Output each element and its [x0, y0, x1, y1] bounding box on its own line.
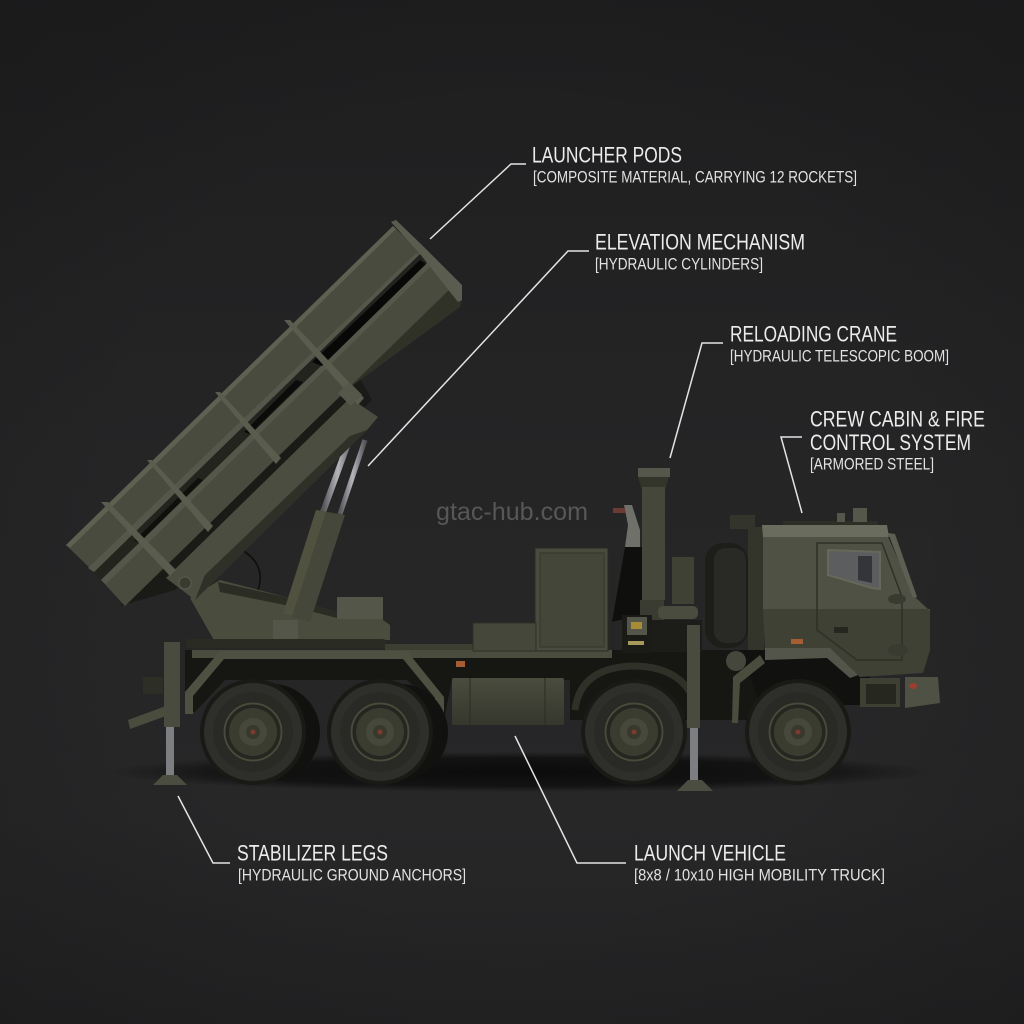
- elevation mechanism: [120, 378, 390, 648]
- rear light box: [143, 677, 163, 694]
- fuel tank: [452, 678, 564, 725]
- arm underside: [195, 430, 367, 600]
- callout: stabilizer legs: STABILIZER LEGS: [237, 840, 388, 866]
- rear bumper: [128, 706, 166, 729]
- black slit: [312, 260, 426, 366]
- bracket: [338, 382, 362, 406]
- wheels: [200, 679, 851, 785]
- red handle: [613, 508, 625, 513]
- strap 2: [215, 392, 281, 464]
- flatbed band: [192, 650, 612, 658]
- machinery block: [652, 620, 702, 652]
- launcher pods: [66, 220, 462, 606]
- callout: launch vehicle: LAUNCH VEHICLE: [634, 840, 786, 866]
- windshield strip: [888, 533, 917, 598]
- pod side shading: [330, 285, 462, 392]
- control panel: [622, 615, 652, 653]
- arch shadow: [740, 650, 880, 705]
- dark underframe: [185, 650, 760, 720]
- callout: elevation mechanism: [368, 230, 805, 466]
- callout: launcher pods: LAUNCHER PODS: [532, 142, 682, 168]
- hinge 1: [888, 594, 906, 604]
- base frame: [190, 580, 390, 642]
- roof dome: [783, 521, 878, 525]
- hydraulic box: [672, 557, 694, 604]
- cylinder: [283, 510, 345, 622]
- red light: [909, 683, 917, 689]
- callout: stabilizer legs: [178, 796, 466, 884]
- step inner: [866, 684, 896, 704]
- marker light: [456, 661, 465, 667]
- pipe coil behind arm: [225, 545, 260, 602]
- lower pod: [101, 262, 452, 606]
- storage box large: [535, 548, 608, 651]
- rear fender: [732, 655, 765, 723]
- cylinder highlight: [283, 510, 326, 616]
- strap 3: [147, 460, 213, 532]
- wheel 2: [327, 679, 433, 785]
- upper pod ridge: [88, 253, 421, 572]
- callout: reloading crane: [HYDRAULIC TELESCOPIC BOOM]: [730, 348, 949, 366]
- callout: launcher pods: [COMPOSITE MATERIAL, CARRYING 12 ROCKETS]: [533, 168, 857, 186]
- strap 1: [284, 320, 364, 405]
- callout: stabilizer legs: [HYDRAULIC GROUND ANCHORS]: [238, 866, 466, 884]
- roof box 1: [853, 508, 867, 522]
- step box: [860, 678, 900, 707]
- deck rail: [385, 644, 473, 650]
- piston rod 2: [340, 440, 365, 514]
- turntable: [186, 639, 386, 648]
- ground shadow: [110, 752, 930, 792]
- upper pod: [66, 226, 421, 572]
- callout: launcher pods: [430, 142, 857, 239]
- rear fender frame: [185, 651, 444, 715]
- window: [828, 550, 880, 589]
- cab lower: [763, 609, 930, 677]
- gap between pods: [93, 254, 428, 582]
- callout: elevation mechanism: ELEVATION MECHANISM: [595, 230, 805, 254]
- strap 4: [101, 502, 176, 576]
- door: [817, 543, 902, 660]
- upper pod top edge: [66, 226, 396, 548]
- hinge 2: [888, 644, 908, 656]
- back wheels behind: [224, 684, 448, 780]
- mudguard front axle: [575, 666, 694, 710]
- spare wheel: [705, 543, 748, 648]
- roof box 2: [837, 513, 845, 522]
- hoses: [612, 547, 642, 622]
- callout: crew cabin and fire control system: CONTROL SYSTEM: [810, 430, 971, 455]
- window pane: [858, 556, 872, 583]
- reloading crane: [612, 468, 702, 653]
- rear column: [748, 527, 764, 650]
- lower fender: [765, 648, 858, 678]
- arm pivot: [179, 577, 191, 589]
- lower pod ridge: [101, 262, 433, 584]
- launcher arm: [166, 398, 378, 600]
- callout: launch vehicle: [515, 736, 885, 884]
- rear leg: [153, 642, 187, 785]
- crew cabin: [726, 508, 940, 723]
- storage box small: [473, 623, 536, 651]
- bumper: [905, 677, 940, 708]
- watermark: gtac-hub.com: [436, 498, 588, 526]
- orange marker: [791, 639, 803, 644]
- wheel 1: [200, 679, 306, 785]
- wheel 3: [581, 679, 687, 785]
- pod to arm shadow: [120, 378, 372, 606]
- callout: reloading crane: [670, 322, 949, 458]
- ball: [726, 651, 746, 671]
- front leg: [677, 625, 713, 791]
- cylinder mount: [273, 620, 298, 641]
- rear vent: [730, 515, 755, 529]
- callout: elevation mechanism: [HYDRAULIC CYLINDERS]: [595, 256, 763, 274]
- base box: [337, 597, 383, 619]
- stabilizer legs: [153, 625, 713, 791]
- base shaded panel: [218, 582, 337, 618]
- pod end face: [391, 220, 462, 302]
- boom base: [640, 600, 664, 630]
- callout: launch vehicle: [8x8 / 10x10 HIGH MOBILITY TRUCK]: [634, 866, 885, 884]
- callout: crew cabin and fire control system: [ARMORED STEEL]: [810, 456, 934, 474]
- piston rod 1: [323, 430, 353, 512]
- lower slit: [134, 478, 203, 542]
- boom: [642, 487, 665, 600]
- cross pipe: [658, 606, 698, 619]
- wheel 4: [745, 679, 851, 785]
- hook: [624, 505, 640, 547]
- boom head: [638, 468, 670, 477]
- roof band: [762, 525, 889, 537]
- callout: crew cabin and fire control system: [781, 406, 985, 513]
- callout: reloading crane: RELOADING CRANE: [730, 322, 897, 346]
- cab upper: [763, 537, 930, 611]
- door handle: [834, 627, 848, 633]
- middle slit: [244, 380, 303, 434]
- boom upper: [638, 477, 669, 490]
- truck chassis: [128, 548, 760, 729]
